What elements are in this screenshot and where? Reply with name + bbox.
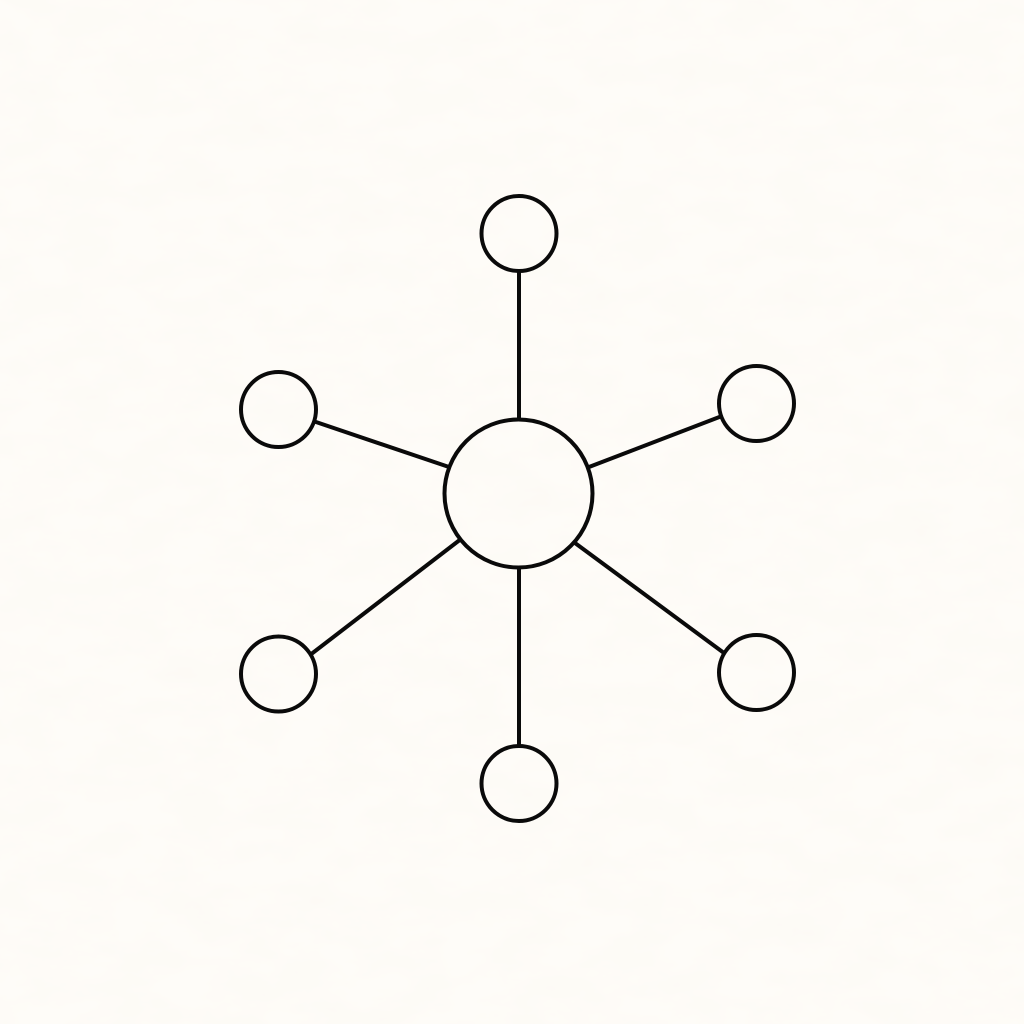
- spoke: upper right: [589, 416, 722, 467]
- node: bottom: [482, 746, 556, 821]
- spoke: top: [517, 271, 521, 420]
- node: upper right: [719, 366, 794, 441]
- spoke: lower left: [310, 539, 461, 655]
- central hub circle: [444, 420, 592, 568]
- node: lower right: [719, 635, 794, 710]
- spoke: upper left: [313, 421, 449, 467]
- node: lower left: [241, 636, 316, 712]
- spokes connecting hub to outer nodes: [310, 271, 724, 746]
- spoke: bottom: [517, 567, 521, 746]
- spoke: lower right: [575, 543, 724, 653]
- node: upper left: [241, 372, 316, 447]
- node: top: [482, 196, 556, 271]
- circles of the diagram: [241, 196, 794, 821]
